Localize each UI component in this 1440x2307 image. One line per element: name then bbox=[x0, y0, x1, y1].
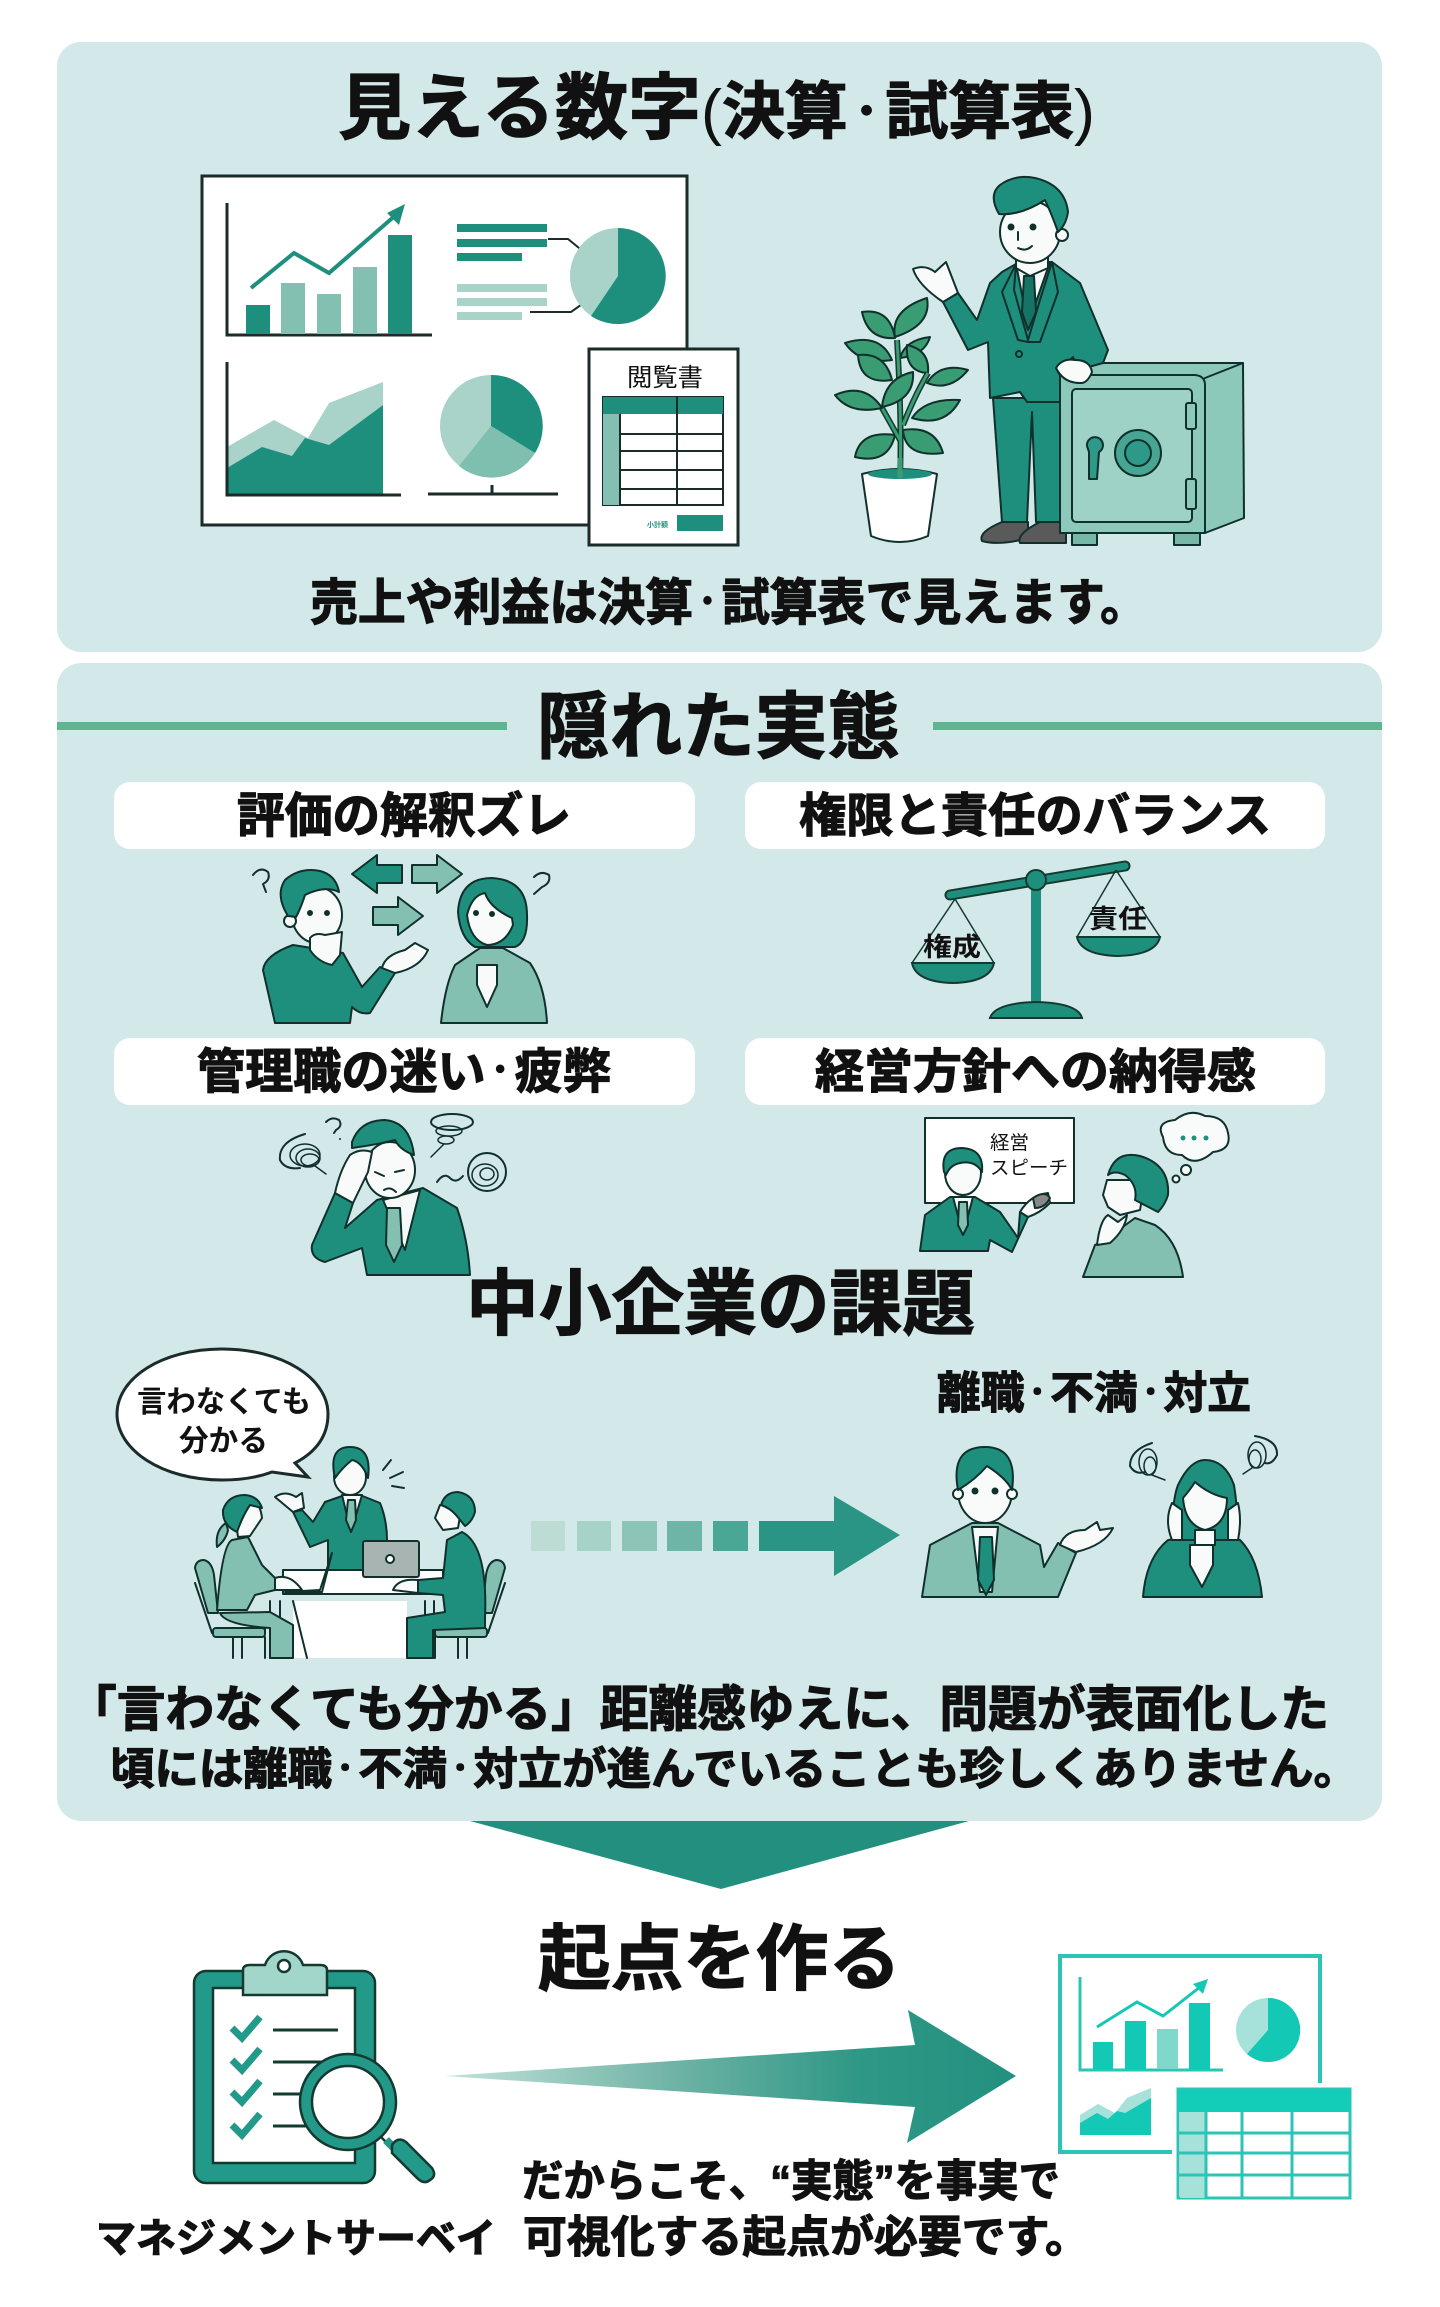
speech text line 1: 言わなくても bbox=[137, 1386, 311, 1419]
body text: SME challenges: 頃には離職 bbox=[110, 1745, 330, 1794]
label: evaluation gap: 評価の解釈ズレ bbox=[237, 790, 571, 843]
label: evaluation gap bbox=[114, 782, 695, 849]
pie chart bbox=[428, 375, 558, 494]
scale label: authority: 権成 bbox=[923, 932, 981, 962]
label: turnover, dissatisfaction, conflict: ・ bbox=[1024, 1377, 1050, 1407]
heading rule left bbox=[57, 722, 507, 730]
heading rule right bbox=[933, 722, 1382, 730]
body text: SME challenges: 「言わなくても分かる」距離感ゆえに、問題が表面化した bbox=[68, 1683, 1329, 1737]
panel: hidden reality bbox=[57, 663, 1382, 1821]
illustration: document bbox=[589, 349, 738, 545]
title: visible numbers: ・ bbox=[848, 91, 885, 132]
arrow: downward triangle bbox=[470, 1821, 969, 1889]
label: manager fatigue: 管理職の迷い bbox=[197, 1046, 485, 1099]
illustration: document: 小計額 bbox=[647, 520, 668, 529]
label: authority balance bbox=[745, 782, 1325, 849]
icon: management speech bbox=[920, 1113, 1229, 1277]
speech board text: 経営 bbox=[990, 1132, 1029, 1154]
body text: conclusion: だからこそ、“実態”を事実で bbox=[522, 2157, 1060, 2206]
title: visible numbers: ) bbox=[1074, 78, 1095, 147]
body text: SME challenges: 対立が進んでいることも珍しくありません。 bbox=[473, 1745, 1358, 1794]
table bbox=[1178, 2089, 1350, 2198]
caption: visible numbers: ・ bbox=[693, 586, 722, 619]
caption: visible numbers: 試算表で見えます。 bbox=[722, 575, 1148, 631]
illustration: safe bbox=[1056, 360, 1244, 545]
title: create a starting point: 起点を作る bbox=[538, 1920, 901, 2000]
label: turnover, dissatisfaction, conflict: 不満 bbox=[1050, 1369, 1138, 1418]
label: buy-in to policy bbox=[745, 1038, 1325, 1105]
illustration: team meeting bbox=[195, 1447, 505, 1658]
label: buy-in to policy: 経営方針への納得感 bbox=[815, 1045, 1256, 1098]
label: authority balance: 権限と責任のバランス bbox=[799, 789, 1271, 842]
title: hidden reality: 隠れた実態 bbox=[537, 687, 900, 768]
bar chart bbox=[227, 203, 432, 335]
label: manager fatigue bbox=[114, 1038, 695, 1105]
title: visible numbers: 見える数字(決算 bbox=[338, 69, 846, 149]
icon: clipboard with magnifier bbox=[194, 1951, 434, 2183]
speech text line 2: 分かる bbox=[179, 1425, 268, 1458]
table bbox=[603, 397, 723, 505]
body text: SME challenges: ・ bbox=[332, 1753, 358, 1783]
title: visible numbers: 試算表 bbox=[885, 78, 1074, 147]
icon: scales bbox=[912, 866, 1160, 1018]
body text: SME challenges: 不満 bbox=[358, 1745, 447, 1794]
area chart bbox=[227, 362, 401, 495]
label: manager fatigue: ・ bbox=[486, 1055, 515, 1087]
label: turnover, dissatisfaction, conflict: 対立 bbox=[1164, 1369, 1251, 1418]
icon: tired manager bbox=[280, 1114, 506, 1275]
illustration: chart board bbox=[202, 176, 687, 525]
body text: SME challenges: ・ bbox=[447, 1753, 473, 1783]
speech board text line 2: スピーチ bbox=[990, 1158, 1068, 1179]
arrow: large gradient bbox=[445, 2010, 1016, 2143]
body text: conclusion bbox=[522, 2157, 1089, 2262]
illustration: stressed woman bbox=[1130, 1436, 1277, 1597]
illustration: troubled man bbox=[922, 1447, 1113, 1597]
scale label: responsibility: 責任 bbox=[1089, 904, 1147, 934]
icon: two people misunderstanding bbox=[253, 855, 549, 1023]
label: manager fatigue: 疲弊 bbox=[515, 1046, 611, 1099]
arrow: dashed transition bbox=[531, 1496, 900, 1576]
illustration: presenter man bbox=[913, 177, 1108, 543]
document title: 閲覧書 bbox=[627, 364, 703, 392]
title: SME challenges: 中小企業の課題 bbox=[466, 1265, 975, 1345]
illustration: plant bbox=[835, 298, 968, 542]
pie chart with legend bbox=[457, 224, 666, 324]
label: management survey: マネジメントサーベイ bbox=[96, 2217, 496, 2261]
label: turnover, dissatisfaction, conflict: ・ bbox=[1138, 1377, 1164, 1407]
body text: conclusion: 可視化する起点が必要です。 bbox=[523, 2213, 1089, 2262]
body text: SME challenges bbox=[68, 1683, 1358, 1794]
label: turnover, dissatisfaction, conflict: 離職 bbox=[937, 1369, 1025, 1418]
icon: report dashboard bbox=[1060, 1956, 1350, 2198]
caption: visible numbers: 売上や利益は決算 bbox=[310, 575, 710, 631]
speech bubble bbox=[117, 1349, 328, 1480]
panel: visible numbers bbox=[57, 42, 1382, 652]
